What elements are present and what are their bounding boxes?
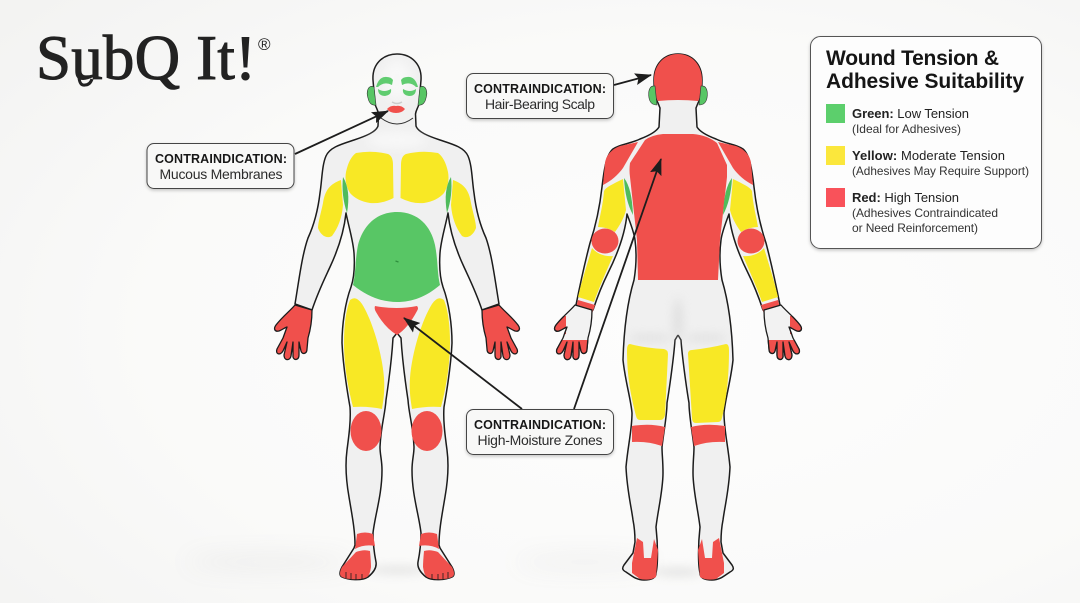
lips: red: [387, 106, 405, 113]
legend item: yellow: [826, 146, 1029, 178]
body highlights: front: [367, 60, 427, 148]
legend item: red: [826, 188, 998, 235]
knees: red: [350, 411, 442, 451]
ears: green: [367, 86, 427, 105]
back: red: [630, 134, 727, 280]
body outline: front: [295, 54, 499, 580]
wrists: red: [576, 300, 780, 314]
legend item: green: [826, 104, 969, 136]
callout: mucous membranes: CONTRAINDICATION:: [155, 152, 287, 166]
legend item: yellow: Yellow: Moderate Tension: [852, 148, 1005, 163]
arrow: to back: [574, 159, 661, 409]
toes: [346, 572, 448, 580]
upper arms: yellow: [598, 179, 758, 232]
callout: mucous membranes: Mucous Membranes: [160, 166, 282, 182]
legend heading: [826, 47, 1024, 93]
callout: hair-bearing scalp: [466, 74, 614, 118]
legend item: red: or Need Reinforcement): [852, 221, 978, 235]
arrow: to scalp: [614, 75, 651, 85]
upper arms: yellow: [318, 180, 476, 237]
scalp: red: [654, 54, 702, 101]
heels: red: [632, 538, 724, 580]
figure: back view: [555, 54, 801, 580]
chest: yellow: [346, 152, 448, 203]
legend item: red: Red: High Tension: [852, 190, 959, 205]
legend item: green: Green: Low Tension: [852, 106, 969, 121]
hands: white palms and red fingers: [555, 305, 801, 360]
inner arms: green: [624, 178, 732, 215]
shoulders: red: [603, 142, 753, 185]
forearms: yellow: [578, 248, 778, 302]
back thighs: yellow: [627, 344, 729, 423]
icon: registered mark: ®: [258, 35, 271, 54]
logo: SubQ It!: SubQ It!: [36, 23, 256, 93]
navel: [396, 261, 398, 262]
floor shadows: [185, 556, 703, 576]
ears: green: [649, 86, 707, 105]
eyebrows and under-eyes: green: [376, 77, 418, 96]
legend item: red: (Adhesives Contraindicated: [852, 206, 998, 220]
nose shading: [392, 102, 402, 104]
callout: hair-bearing scalp: CONTRAINDICATION:: [474, 82, 606, 96]
figure: front view: [275, 54, 519, 580]
callout: hair-bearing scalp: Hair-Bearing Scalp: [485, 96, 595, 112]
callout: high-moisture zones: High-Moisture Zones: [478, 432, 602, 448]
arrow: to groin: [404, 318, 522, 409]
body outline: back: [576, 54, 780, 580]
thighs: yellow: [344, 298, 450, 409]
legend heading: Adhesive Suitability: [826, 70, 1024, 93]
legend item: yellow: (Adhesives May Require Support): [852, 164, 1029, 178]
chin line: [381, 118, 413, 124]
arrow: to lips: [295, 111, 388, 154]
ankles and feet: red: [340, 532, 454, 579]
elbows: red: [592, 228, 764, 254]
legend heading: Wound Tension &: [826, 47, 999, 70]
callout: mucous membranes: [147, 144, 294, 188]
callout: high-moisture zones: CONTRAINDICATION:: [474, 418, 606, 432]
hands: red: [275, 305, 519, 360]
panel: legend: [810, 36, 1042, 248]
buttock shading: [628, 298, 728, 342]
icon: syringe hook on the u: [79, 78, 92, 85]
abdomen: green: [353, 212, 440, 302]
legend item: green: (Ideal for Adhesives): [852, 122, 961, 136]
back of knees: red: [632, 425, 725, 446]
callout: high-moisture zones: [466, 410, 614, 454]
groin: red: [375, 306, 418, 335]
inner arms: green: [342, 177, 452, 213]
